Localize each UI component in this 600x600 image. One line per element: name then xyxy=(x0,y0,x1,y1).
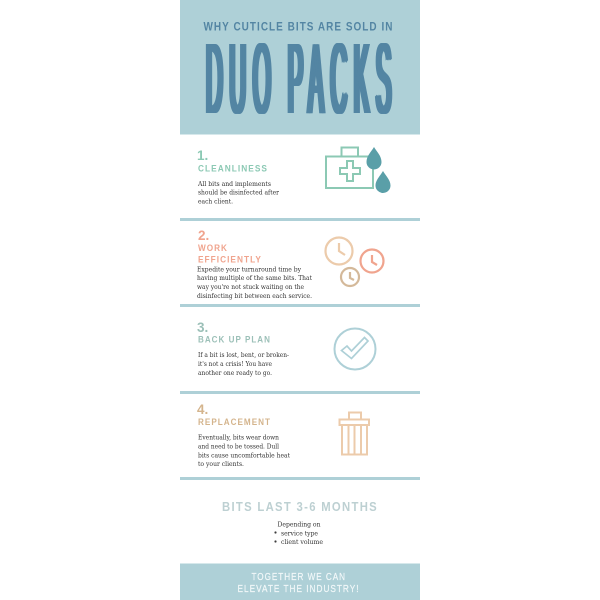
body text: bits cause uncomfortable heat xyxy=(198,452,290,460)
stat details xyxy=(274,520,323,546)
body text: to your clients. xyxy=(198,460,244,468)
footer text xyxy=(238,572,360,595)
divider 4 xyxy=(180,477,420,480)
footer text: TOGETHER WE CAN xyxy=(252,572,346,583)
title line: WHY CUTICLE BITS ARE SOLD IN xyxy=(204,22,394,34)
divider 2 xyxy=(180,304,420,307)
stat details: client volume xyxy=(281,538,323,546)
body text: another one ready to go. xyxy=(198,369,272,377)
icon: medical kit with drops xyxy=(326,147,390,193)
heading: work efficiently xyxy=(198,243,262,266)
header panel xyxy=(180,0,420,134)
divider 3 xyxy=(180,391,420,394)
stat details: service type xyxy=(281,530,318,538)
stat details: Depending on xyxy=(278,520,321,528)
icon: clocks xyxy=(326,238,384,286)
body text: having multiple of the same bits. That xyxy=(197,274,312,282)
heading: back up plan: BACK UP PLAN xyxy=(198,334,271,346)
icon: trash can xyxy=(340,412,369,454)
body text: All bits and implements xyxy=(197,180,272,188)
body text: should be disinfected after xyxy=(198,188,280,196)
icon: check circle xyxy=(334,328,376,370)
panel: work efficiently xyxy=(197,228,384,300)
body text xyxy=(197,180,280,206)
footer banner xyxy=(180,564,420,600)
panel: cleanliness xyxy=(197,147,390,206)
body text xyxy=(197,266,312,300)
divider 1 xyxy=(180,218,420,221)
body text: each client. xyxy=(198,198,233,206)
heading: replacement: REPLACEMENT xyxy=(198,417,271,428)
body text: If a bit is lost, bent, or broken- xyxy=(198,351,289,359)
number 4: 4. xyxy=(197,402,208,417)
body text xyxy=(198,434,290,468)
heading: work efficiently: EFFICIENTLY xyxy=(198,254,262,266)
number 3: 3. xyxy=(197,320,208,335)
heading: work efficiently: WORK xyxy=(198,243,228,254)
title: duo packs: DUO PACKS xyxy=(204,23,396,135)
panel: back up plan xyxy=(197,320,376,377)
body text xyxy=(198,351,289,377)
stat heading: BITS LAST 3-6 MONTHS xyxy=(222,499,378,514)
body text: disinfecting bit between each service. xyxy=(197,292,312,300)
panel: replacement xyxy=(197,402,369,468)
body text: it's not a crisis! You have xyxy=(198,360,272,368)
number 1: 1. xyxy=(197,148,208,163)
heading: cleanliness: CLEANLINESS xyxy=(198,164,268,174)
body text: and need to be tossed. Dull xyxy=(198,442,279,450)
body text: way you're not stuck waiting on the xyxy=(197,283,304,291)
number 2: 2. xyxy=(198,228,209,243)
footer text: ELEVATE THE INDUSTRY! xyxy=(238,584,360,595)
body text: Eventually, bits wear down xyxy=(198,434,280,442)
body text: Expedite your turnaround time by xyxy=(197,266,301,274)
